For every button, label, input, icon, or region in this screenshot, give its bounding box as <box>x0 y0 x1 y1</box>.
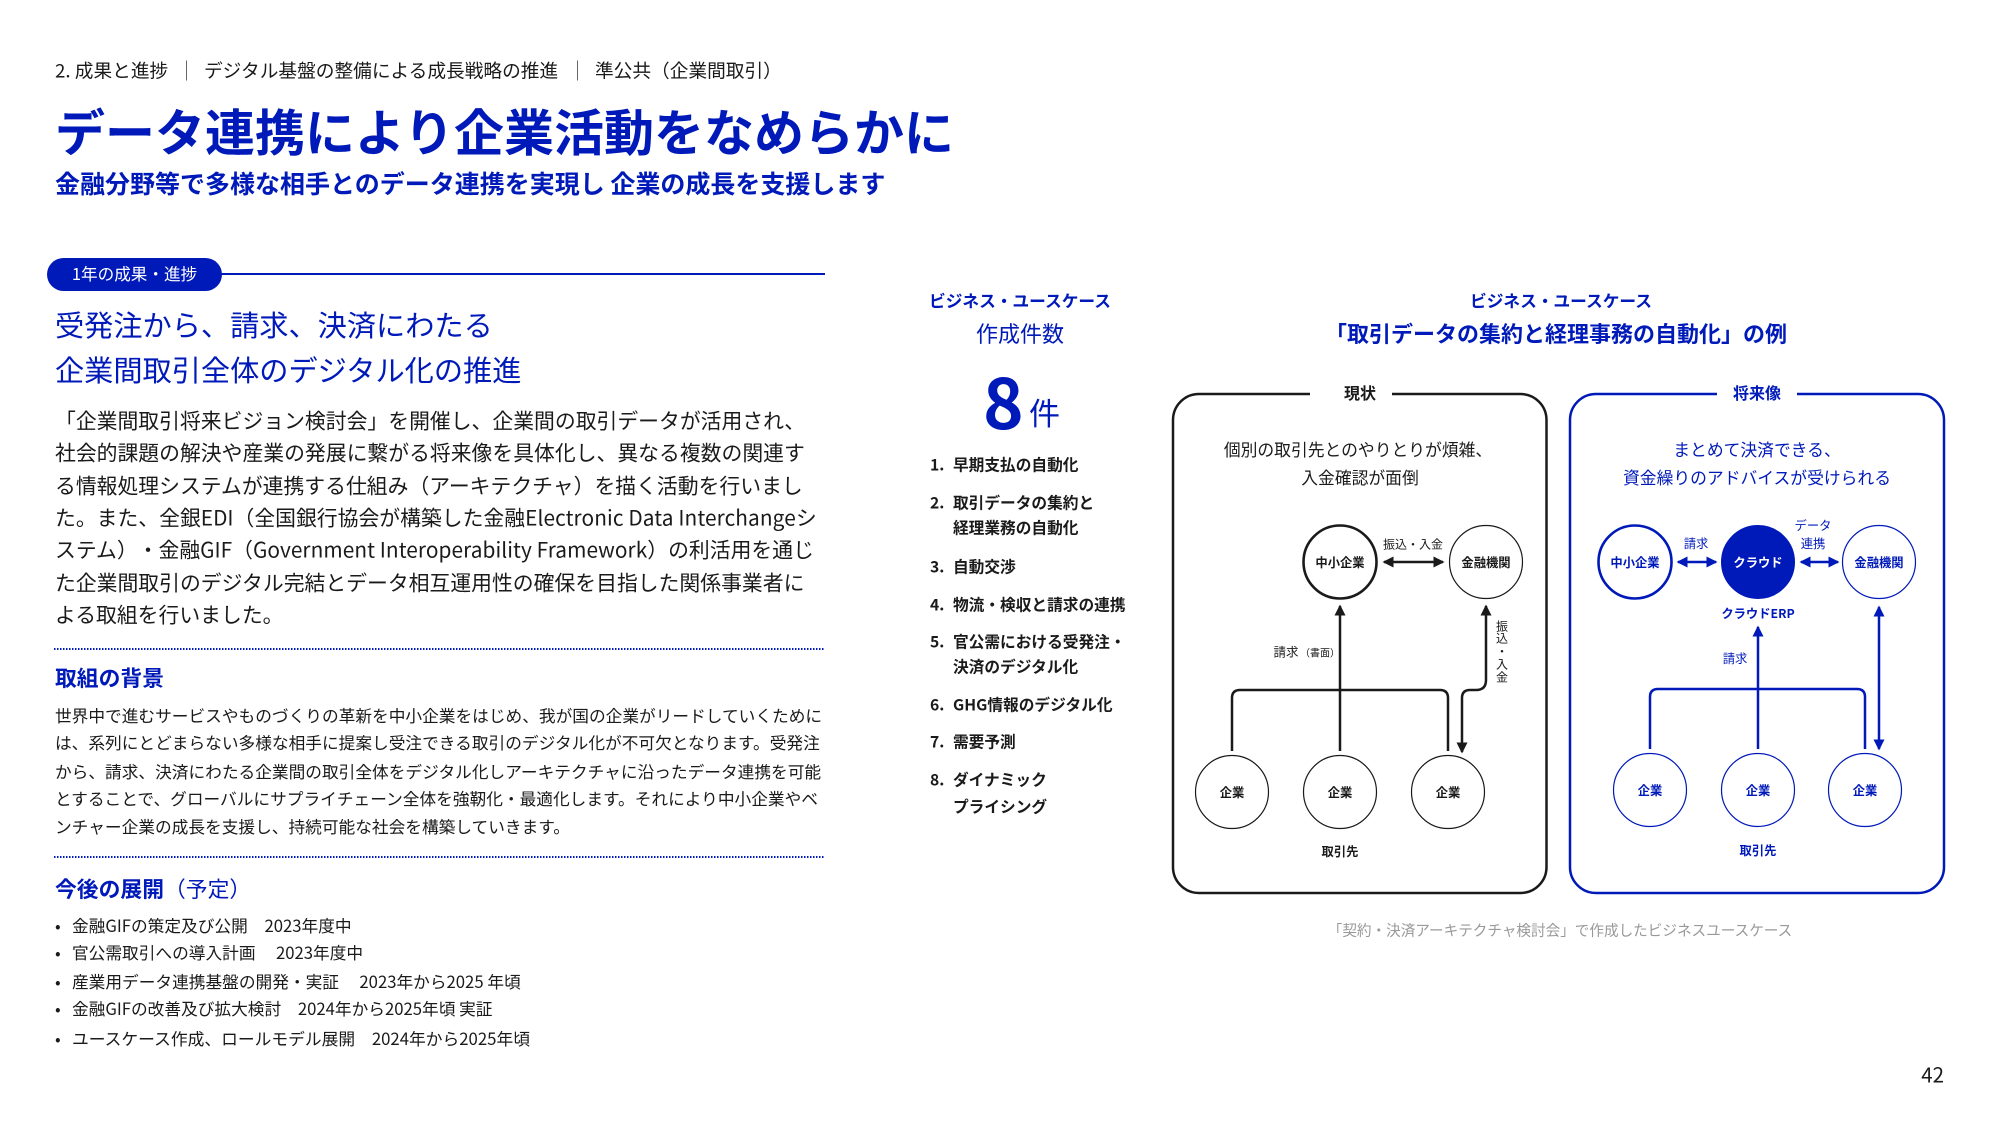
current connector lines <box>1232 562 1486 752</box>
current arrow labels: 金 <box>1496 668 1508 686</box>
current circle labels <box>1220 553 1511 860</box>
current circle labels: 取引先 <box>1322 842 1358 860</box>
main body text <box>55 405 817 629</box>
future arrow labels: 請求 <box>1684 534 1708 552</box>
big number: 8 cases: 件 <box>1029 389 1060 434</box>
use case numbered list: 3. <box>930 555 944 578</box>
current arrow labels: 入 <box>1496 656 1508 672</box>
background text <box>55 703 822 838</box>
future arrow labels <box>1684 516 1831 667</box>
future circle labels: 企業 <box>1746 781 1770 799</box>
use case numbered list: 1. <box>930 453 944 476</box>
use case numbered list: 6. <box>930 693 944 716</box>
main body text: た。また、全銀EDI（全国銀行協会が構築した金融Electronic Data Interchangeシ <box>55 502 817 532</box>
future plans list: ユースケース作成、ロールモデル展開 2024年から2025年頃 <box>72 1026 530 1050</box>
section heading <box>55 303 521 390</box>
current arrow labels: ・ <box>1496 642 1508 660</box>
use case numbered list: 需要予測 <box>953 730 1016 753</box>
future plans list: 官公需取引への導入計画 2023年度中 <box>72 940 363 964</box>
future connector lines <box>1650 562 1879 749</box>
subtitle: 金融分野等で多様な相手とのデータ連携を実現し 企業の成長を支援します <box>55 165 885 201</box>
future circle labels: クラウドERP <box>1721 604 1795 622</box>
breadcrumb <box>55 56 782 84</box>
section heading: 企業間取引全体のデジタル化の推進 <box>55 348 521 390</box>
main body text: た企業間取引のデジタル完結とデータ相互運用性の確保を目指した関係事業者に <box>55 567 804 597</box>
main body text: る情報処理システムが連携する仕組み（アーキテクチャ）を描く活動を行いまし <box>55 470 803 500</box>
use case numbered list: 経理業務の自動化 <box>953 516 1078 539</box>
future plans list: • <box>55 1026 61 1050</box>
source caption: 「契約・決済アーキテクチャ検討会」で作成したビジネスユースケース <box>1328 919 1792 940</box>
current circle labels: 企業 <box>1436 783 1460 801</box>
current description: 入金確認が面倒 <box>1301 465 1419 489</box>
future label: 将来像 <box>1733 380 1781 404</box>
future arrow labels: 請求 <box>1723 649 1747 667</box>
big number: 8 cases: 8 <box>983 349 1024 449</box>
future arrow labels: 連携 <box>1801 534 1825 552</box>
breadcrumb: 2. 成果と進捗 <box>55 56 168 84</box>
use case count subheading: 作成件数 <box>976 317 1064 349</box>
use case numbered list: 8. <box>930 768 944 791</box>
current label: 現状 <box>1344 380 1376 404</box>
future frame <box>1570 394 1944 893</box>
use case numbered list: 取引データの集約と <box>953 491 1094 514</box>
heading: background: 取組の背景 <box>55 662 164 693</box>
panel: current state <box>1173 380 1546 893</box>
big number: 8 cases <box>983 349 1060 449</box>
breadcrumb: デジタル基盤の整備による成長戦略の推進 <box>204 56 558 84</box>
diagram heading: 「取引データの集約と経理事務の自動化」の例 <box>1325 317 1787 349</box>
future description: まとめて決済できる、 <box>1673 437 1841 461</box>
current circle labels: 中小企業 <box>1315 553 1365 571</box>
future plans list: • <box>55 996 61 1020</box>
use case count heading: ビジネス・ユースケース <box>929 288 1111 312</box>
use case numbered list: GHG情報のデジタル化 <box>953 693 1113 716</box>
main body text: 社会的課題の解決や産業の発展に繋がる将来像を具体化し、異なる複数の関連す <box>55 437 805 467</box>
future arrow labels: データ <box>1795 516 1831 534</box>
background text: とすることで、グローバルにサプライチェーン全体を強靭化・最適化します。それにより中小企業やベ <box>55 786 818 810</box>
breadcrumb: 準公共（企業間取引） <box>595 56 782 84</box>
current description: 個別の取引先とのやりとりが煩雑、 <box>1224 437 1492 461</box>
background text: ンチャー企業の成長を支援し、持続可能な社会を構築していきます。 <box>55 814 570 838</box>
future plans list: • <box>55 940 61 964</box>
future plans list: 金融GIFの改善及び拡大検討 2024年から2025年頃 実証 <box>72 996 492 1020</box>
use case numbered list: 官公需における受発注・ <box>953 630 1126 653</box>
future circle labels: クラウド <box>1733 553 1783 571</box>
panel: future state <box>1570 380 1944 893</box>
future circle labels: 中小企業 <box>1610 553 1660 571</box>
main body text: よる取組を行いました。 <box>55 599 283 629</box>
future circles <box>1598 526 1916 826</box>
page number: 42 <box>1921 1059 1944 1089</box>
use case numbered list: 5. <box>930 630 944 653</box>
current arrow labels <box>1273 536 1508 686</box>
use case numbered list <box>930 453 1126 818</box>
section tag: 1-year results with rule: 1年の成果・進捗 <box>72 261 197 285</box>
current arrow labels: 込 <box>1496 630 1508 646</box>
current arrow labels: 請求 <box>1273 642 1299 660</box>
current arrow labels: （書面） <box>1300 644 1340 660</box>
future plans list: 産業用データ連携基盤の開発・実証 2023年から2025 年頃 <box>72 969 521 993</box>
background text: 世界中で進むサービスやものづくりの革新を中小企業をはじめ、我が国の企業がリードしていくために <box>55 703 822 727</box>
current arrow labels: 振 <box>1496 618 1508 634</box>
heading: future plans: 今後の展開（予定） <box>55 873 251 904</box>
current label <box>1310 380 1392 404</box>
current circle labels: 企業 <box>1328 783 1352 801</box>
future plans list: • <box>55 969 61 993</box>
current description <box>1224 437 1492 489</box>
current arrow labels: 振込・入金 <box>1383 536 1443 552</box>
future circle labels: 企業 <box>1638 781 1662 799</box>
current circle labels: 金融機関 <box>1461 553 1511 571</box>
main body text: 「企業間取引将来ビジョン検討会」を開催し、企業間の取引データが活用され、 <box>55 405 805 435</box>
main body text: ステム）・金融GIF（Government Interoperability Framework）の利活用を通じ <box>55 534 814 564</box>
use case numbered list: 7. <box>930 730 944 753</box>
future circle labels <box>1610 553 1904 859</box>
future plans list: • <box>55 913 61 937</box>
background text: は、系列にとどまらない多様な相手に提案し受注できる取引のデジタル化が不可欠となります。受発注 <box>55 730 820 754</box>
use case numbered list: プライシング <box>953 795 1047 818</box>
background text: から、請求、決済にわたる企業間の取引全体をデジタル化しアーキテクチャに沿ったデータ連携を可能 <box>55 759 821 783</box>
future circle labels: 企業 <box>1853 781 1877 799</box>
future circle labels: 金融機関 <box>1854 553 1904 571</box>
use case numbered list: 自動交渉 <box>953 555 1016 578</box>
future plans list: 金融GIFの策定及び公開 2023年度中 <box>72 913 352 937</box>
use case numbered list: 物流・検収と請求の連携 <box>953 593 1126 616</box>
current frame <box>1173 394 1546 893</box>
use case numbered list: 4. <box>930 593 944 616</box>
use case numbered list: 決済のデジタル化 <box>953 655 1078 678</box>
current circle labels: 企業 <box>1220 783 1244 801</box>
use case numbered list: ダイナミック <box>953 768 1047 791</box>
future label <box>1717 380 1797 404</box>
future plans list <box>55 913 530 1050</box>
use case numbered list: 2. <box>930 491 944 514</box>
diagram heading small: ビジネス・ユースケース <box>1470 288 1652 312</box>
current circles <box>1196 526 1522 828</box>
future description: 資金繰りのアドバイスが受けられる <box>1623 465 1891 489</box>
title: データ連携により企業活動をなめらかに <box>55 94 954 166</box>
use case numbered list: 早期支払の自動化 <box>953 453 1078 476</box>
future circle labels: 取引先 <box>1740 841 1776 859</box>
future description <box>1623 437 1891 489</box>
section heading: 受発注から、請求、決済にわたる <box>55 303 493 345</box>
